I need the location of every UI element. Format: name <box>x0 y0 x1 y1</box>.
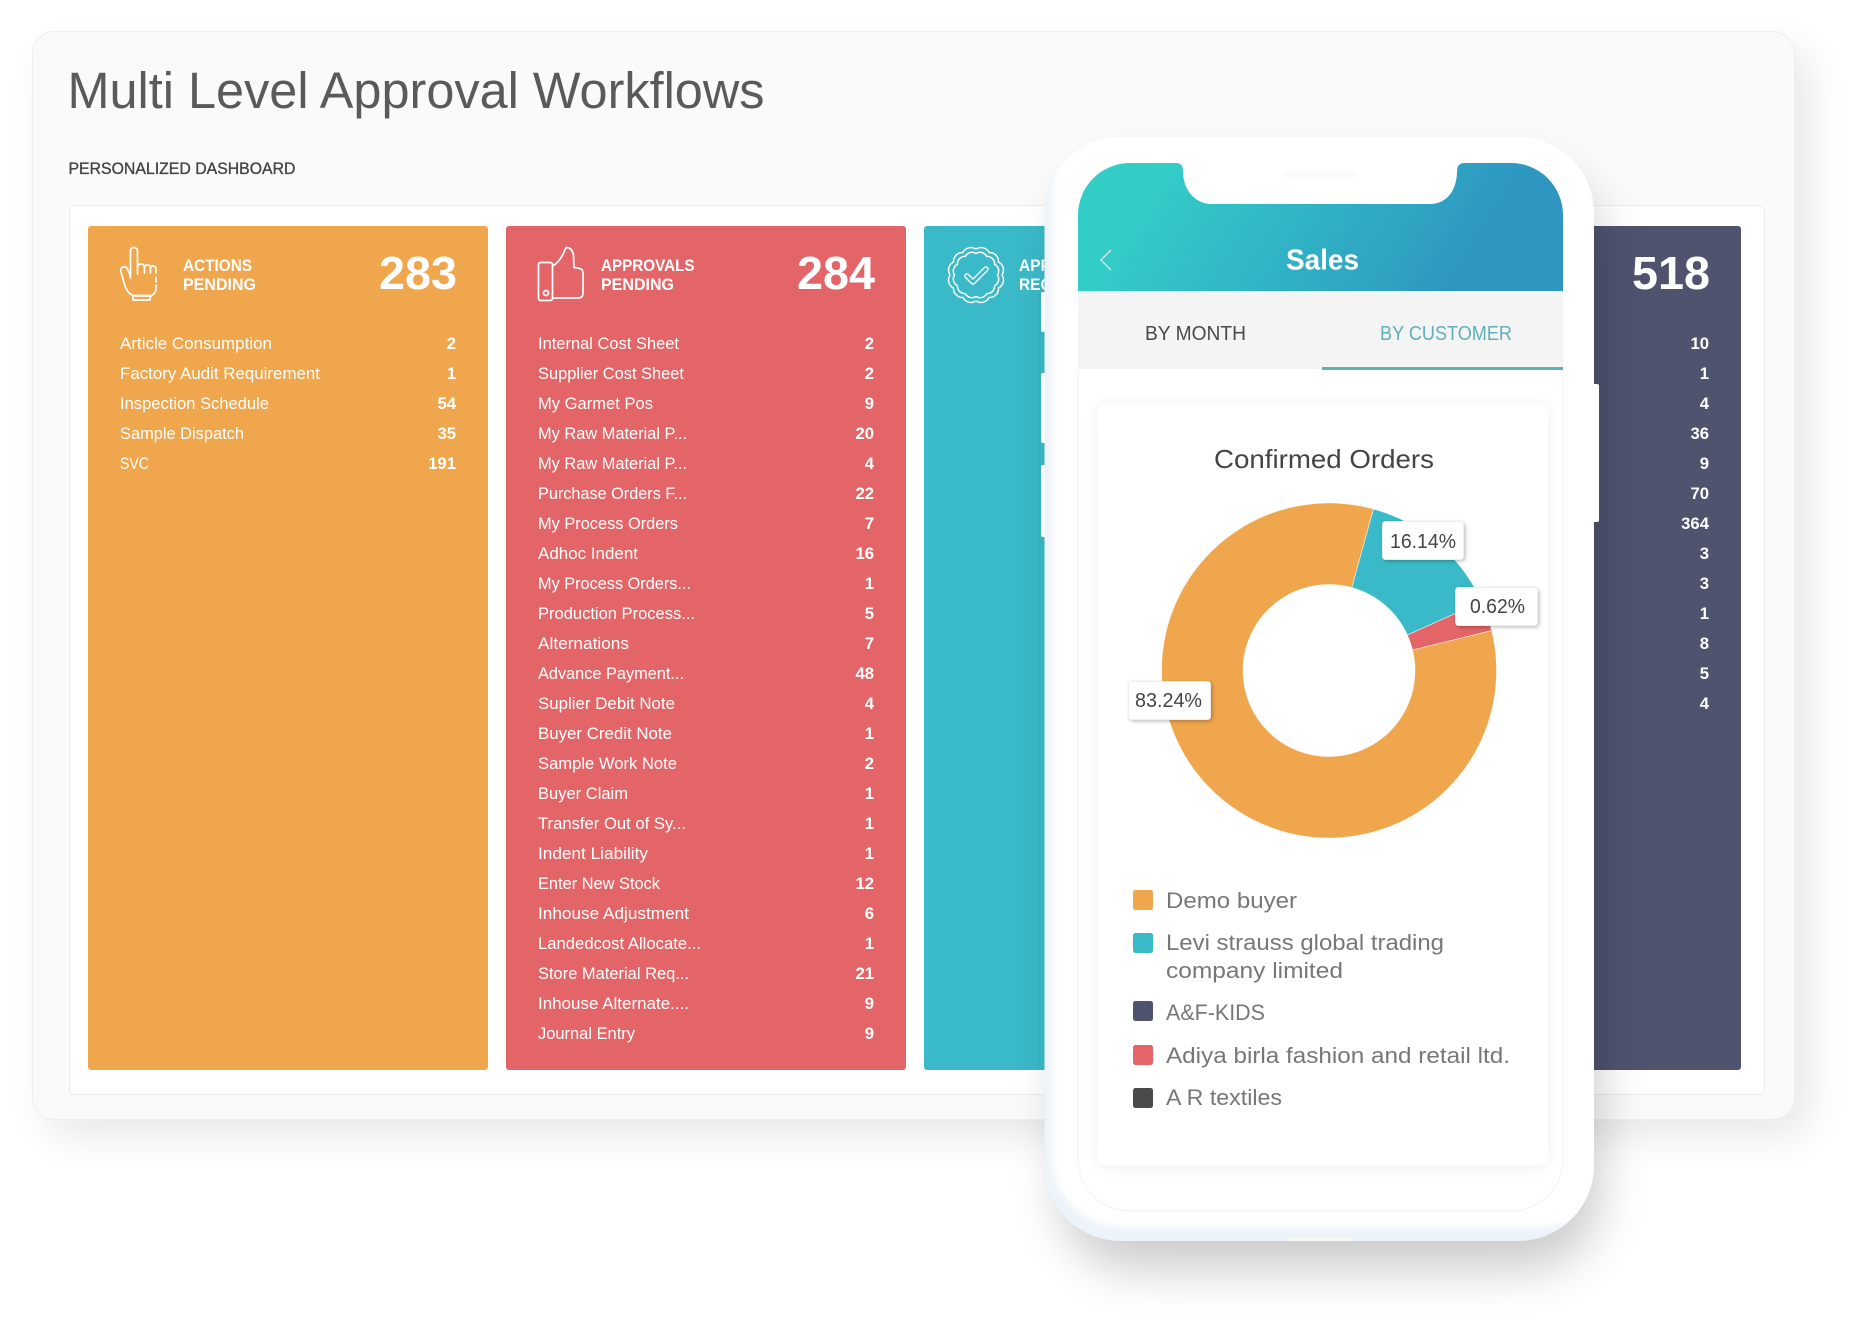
icon: speaker <box>1283 172 1357 179</box>
icon: thumbs up <box>538 248 583 300</box>
list: dark column counts: 5 <box>1700 664 1709 683</box>
heading: actions pending: PENDING <box>183 275 256 294</box>
list: dark column counts: 4 <box>1700 694 1710 713</box>
phone screen outline <box>1078 370 1563 1211</box>
heading: sales: Sales <box>1286 244 1359 276</box>
list: approvals pending items: Suplier Debit Note <box>538 694 675 713</box>
list: dark column counts: 8 <box>1700 634 1709 653</box>
list: approvals pending items: Internal Cost Sheet <box>538 334 679 353</box>
heading: approvals pending <box>601 256 694 294</box>
list: approvals pending items: 1 <box>865 574 874 593</box>
label: 16.14% <box>1382 522 1465 561</box>
list: approvals pending items: Store Material Req... <box>538 964 689 983</box>
list: approvals pending items: Inhouse Adjustment <box>538 904 689 923</box>
label: 83.24% <box>1128 682 1212 721</box>
list: approvals pending items: 2 <box>865 754 874 773</box>
phone mockup <box>1041 120 1612 1270</box>
total: 283: 283 <box>379 247 457 299</box>
list: approvals pending items: 1 <box>865 934 874 953</box>
list: approvals pending items: Advance Payment... <box>538 664 684 683</box>
list: approvals pending items: 4 <box>865 454 875 473</box>
panel: approval requests (mostly hidden behind phone) <box>924 226 1324 1070</box>
card: confirmed orders <box>1098 403 1548 1168</box>
list: approvals pending items: Enter New Stock <box>538 874 660 893</box>
list: approvals pending items: 16 <box>855 544 874 563</box>
label: 0.62% <box>1456 588 1539 627</box>
list: approvals pending items: My Raw Material P... <box>538 424 687 443</box>
list: approvals pending items: Adhoc Indent <box>538 544 638 563</box>
list: actions pending items: 2 <box>447 334 456 353</box>
heading: actions pending: ACTIONS <box>183 256 252 275</box>
heading: approvals pending: PENDING <box>601 275 674 294</box>
list: approvals pending items: 9 <box>865 994 874 1013</box>
list: actions pending items: Inspection Schedule <box>120 394 269 413</box>
list: approvals pending items: Purchase Orders F... <box>538 484 687 503</box>
label: 0.62%: 0.62% <box>1470 596 1525 618</box>
icon: verified badge <box>949 248 1003 302</box>
heading: approval requests <box>1019 256 1104 294</box>
list: dark column counts: 1 <box>1700 604 1709 623</box>
list: approvals pending items: My Process Orders <box>538 514 678 533</box>
list: approvals pending items: 1 <box>865 844 874 863</box>
list: dark column counts: 4 <box>1700 394 1710 413</box>
legend: company limited <box>1166 958 1343 983</box>
list: approvals pending items: My Process Orders... <box>538 574 691 593</box>
legend <box>1133 888 1510 1110</box>
tabs: BY MONTH <box>1145 322 1246 345</box>
list: approvals pending items: 1 <box>865 724 874 743</box>
list: approvals pending items: My Garmet Pos <box>538 394 653 413</box>
donut chart <box>1162 503 1497 838</box>
legend: Levi strauss global trading <box>1166 930 1444 955</box>
list: approvals pending items: 9 <box>865 1024 874 1043</box>
tabs <box>1078 291 1563 370</box>
list: dark column counts: 9 <box>1700 454 1709 473</box>
list: approvals pending items: Production Process... <box>538 604 695 623</box>
heading: approval requests: REQUESTS <box>1019 275 1104 294</box>
heading: actions pending <box>183 256 256 294</box>
list: actions pending items: Factory Audit Requirement <box>120 364 320 383</box>
list: approvals pending items: Landedcost Allocate... <box>538 934 701 953</box>
heading: confirmed orders: Confirmed Orders <box>1214 444 1434 474</box>
list: dark column counts: 3 <box>1700 574 1709 593</box>
panel: approvals pending <box>506 226 906 1070</box>
list: dark column counts: 3 <box>1700 544 1709 563</box>
list: approvals pending items: 6 <box>865 904 874 923</box>
list: dark column counts: 10 <box>1690 334 1709 353</box>
list: approvals pending items: 9 <box>865 394 874 413</box>
list: dark column counts <box>1681 334 1710 713</box>
header: gradient bar with notch <box>1078 163 1563 291</box>
list: dark column counts: 36 <box>1690 424 1709 443</box>
list: approvals pending items: 48 <box>855 664 874 683</box>
label: 16.14%: 16.14% <box>1390 531 1456 553</box>
panel: white card container <box>70 206 1764 1094</box>
legend: Demo buyer <box>1166 888 1298 913</box>
list: approvals pending items: Buyer Credit Note <box>538 724 672 743</box>
icon: back chevron <box>1101 250 1111 270</box>
list: approvals pending items: 2 <box>865 334 874 353</box>
list: actions pending items: 1 <box>447 364 456 383</box>
total: 518: 518 <box>1632 247 1710 299</box>
list: approvals pending items: 21 <box>855 964 874 983</box>
list: approvals pending items: 1 <box>865 784 874 803</box>
panel: dashboard background <box>32 32 1810 1136</box>
list: approvals pending items: Sample Work Note <box>538 754 677 773</box>
list: approvals pending items: Buyer Claim <box>538 784 628 803</box>
tabs: BY CUSTOMER <box>1380 322 1512 345</box>
list: approvals pending items: Journal Entry <box>538 1024 635 1043</box>
label: 83.24%: 83.24% <box>1135 690 1202 712</box>
icon: pointing hand <box>121 248 156 300</box>
list: approvals pending items: 2 <box>865 364 874 383</box>
panel: actions pending <box>88 226 488 1070</box>
list: approvals pending items: 20 <box>855 424 874 443</box>
list: approvals pending items: Supplier Cost Sheet <box>538 364 684 383</box>
list: actions pending items <box>120 334 457 473</box>
list: approvals pending items: Indent Liability <box>538 844 649 863</box>
list: actions pending items: Sample Dispatch <box>120 424 244 443</box>
list: actions pending items: 35 <box>437 424 456 443</box>
legend: Adiya birla fashion and retail ltd. <box>1166 1043 1510 1068</box>
list: approvals pending items: Inhouse Alternate.... <box>538 994 689 1013</box>
heading: approval requests: APPROVAL <box>1019 256 1104 275</box>
title: Multi Level Approval Workflows <box>68 62 764 119</box>
list: approvals pending items: My Raw Material P... <box>538 454 687 473</box>
legend: A R textiles <box>1166 1085 1282 1110</box>
list: dark column counts: 70 <box>1690 484 1709 503</box>
list: approvals pending items: 7 <box>865 634 874 653</box>
list: actions pending items: 54 <box>437 394 457 413</box>
list: dark column counts: 364 <box>1681 514 1710 533</box>
list: approvals pending items <box>538 334 875 1043</box>
list: approvals pending items: 5 <box>865 604 874 623</box>
list: approvals pending items: 7 <box>865 514 874 533</box>
list: approvals pending items: 22 <box>855 484 874 503</box>
legend: A&F-KIDS <box>1166 1000 1265 1025</box>
panel: dark column <box>1342 226 1741 1070</box>
subheading: PERSONALIZED DASHBOARD <box>68 159 296 178</box>
list: approvals pending items: 4 <box>865 694 875 713</box>
list: actions pending items: 191 <box>428 454 456 473</box>
list: dark column counts: 1 <box>1700 364 1709 383</box>
list: approvals pending items: 1 <box>865 814 874 833</box>
heading: approvals pending: APPROVALS <box>601 256 694 275</box>
list: approvals pending items: Alternations <box>538 634 629 653</box>
total: 284: 284 <box>797 247 875 299</box>
list: approvals pending items: Transfer Out of Sy... <box>538 814 686 833</box>
list: actions pending items: SVC <box>120 454 149 473</box>
list: approvals pending items: 12 <box>855 874 874 893</box>
list: actions pending items: Article Consumption <box>120 334 272 353</box>
